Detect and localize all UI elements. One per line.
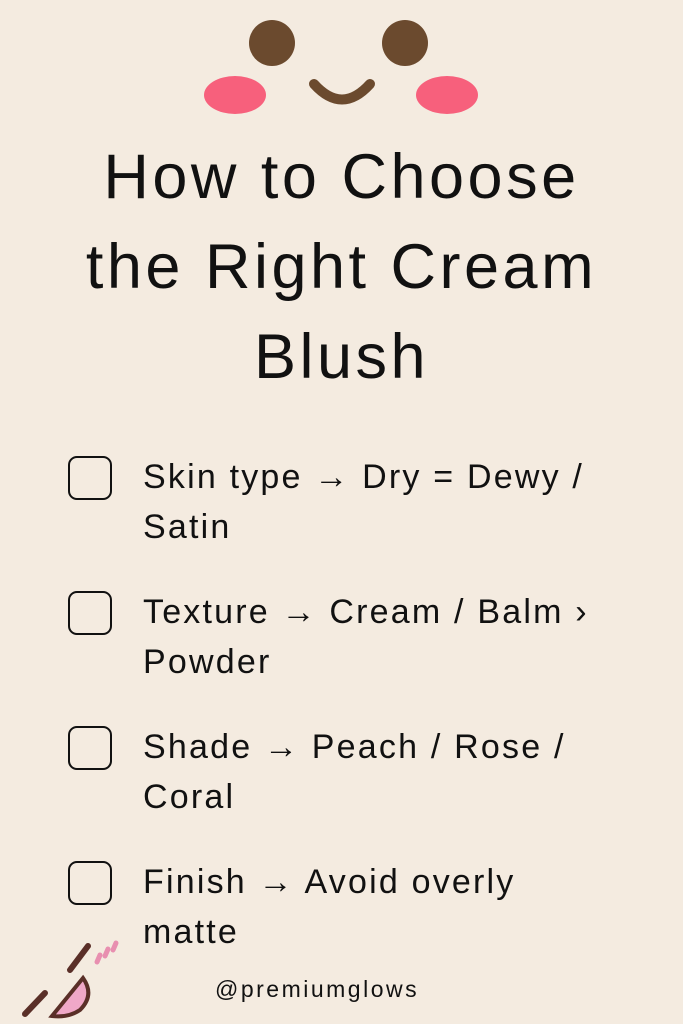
title: How to Choose	[103, 142, 580, 212]
checklist item: finish: Finish → Avoid overly	[143, 863, 516, 901]
checklist item: shade: Shade → Peach / Rose /	[143, 728, 566, 766]
checklist item: shade	[68, 726, 566, 816]
icon: smiley face	[204, 20, 478, 114]
checklist item: texture: Texture → Cream / Balm ›	[143, 593, 589, 631]
title: Blush	[254, 322, 429, 392]
checklist item: texture: Powder	[143, 643, 271, 681]
title: the Right Cream	[86, 232, 597, 302]
checklist item: finish	[68, 861, 516, 951]
title	[86, 142, 597, 392]
checklist item: skin type	[68, 456, 584, 546]
checklist item: skin type: Skin type → Dry = Dewy /	[143, 458, 584, 496]
checklist item: texture	[68, 591, 589, 681]
checklist item: shade: Coral	[143, 778, 235, 816]
checklist item: skin type: Satin	[143, 508, 232, 546]
checklist item: finish: matte	[143, 913, 239, 951]
icon: winking face decoration	[22, 940, 118, 1018]
footer handle: @premiumglows	[215, 976, 419, 1002]
